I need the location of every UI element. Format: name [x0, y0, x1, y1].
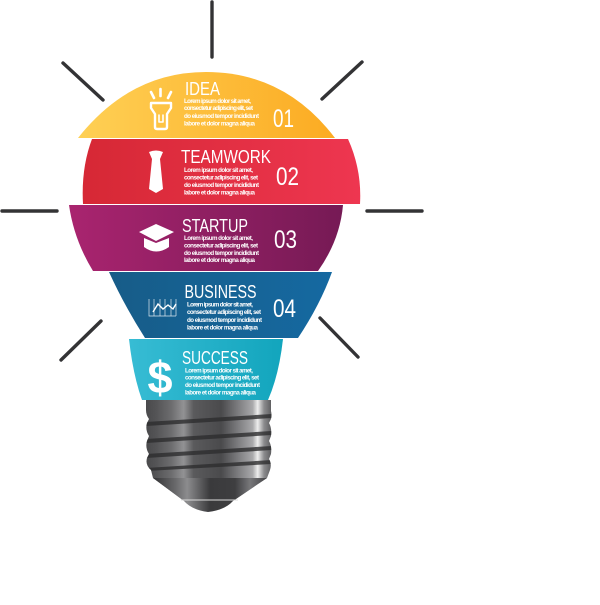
- body text: [185, 368, 260, 396]
- body text: consectetur adipiscing elit, set: [184, 105, 253, 112]
- body text: consectetur adipiscing elit, set: [185, 374, 259, 382]
- body text: do eiusmod tempor incididunt: [184, 113, 259, 120]
- heading: BUSINESS: [184, 282, 256, 302]
- body text: Lorem ipsum dolor sit amet,: [187, 302, 253, 308]
- panel: idea: [78, 72, 335, 138]
- body text: Lorem ipsum dolor sit amet,: [185, 368, 253, 374]
- number: 04: [273, 295, 296, 323]
- panel: teamwork: [83, 139, 360, 204]
- base threads: [146, 400, 272, 501]
- body text: labore et dolor magna aliqua: [184, 120, 256, 128]
- panel: success: [129, 339, 283, 403]
- number: 01: [273, 105, 294, 133]
- body text: consectetur adipiscing elit, set: [184, 174, 258, 182]
- bulb screw base: [146, 400, 272, 512]
- panel: business: [109, 272, 332, 338]
- icon: graduation cap: [139, 224, 174, 252]
- icon: line chart: [149, 299, 176, 316]
- number: 02: [276, 163, 299, 191]
- body text: [187, 302, 262, 332]
- body text: Lorem ipsum dolor sit amet,: [184, 235, 253, 242]
- body text: labore et dolor magna aliqua: [185, 390, 257, 396]
- body text: consectetur adipiscing elit, set: [187, 309, 261, 316]
- body text: labore et dolor magna aliqua: [184, 190, 256, 196]
- body text: do eiusmod tempor incididunt: [184, 250, 259, 257]
- body text: Lorem ipsum dolor sit amet,: [184, 98, 251, 105]
- body text: [184, 98, 259, 128]
- body text: consectetur adipiscing elit, set: [184, 242, 258, 250]
- panel: startup: [69, 205, 343, 271]
- light bulb infographic: [0, 0, 424, 512]
- body text: do eiusmod tempor incididunt: [187, 317, 262, 324]
- number: 03: [274, 226, 297, 254]
- base thread shadows: [146, 414, 272, 471]
- body text: labore et dolor magna aliqua: [187, 324, 259, 332]
- heading: STARTUP: [182, 216, 248, 236]
- icon: flashlight: [151, 89, 171, 129]
- body text: [184, 167, 259, 196]
- base tip: [153, 478, 267, 512]
- body text: labore et dolor magna aliqua: [184, 257, 256, 264]
- heading: SUCCESS: [182, 348, 248, 368]
- icon: dollar sign: $: [147, 352, 173, 403]
- body text: [184, 235, 259, 264]
- body text: Lorem ipsum dolor sit amet,: [184, 167, 253, 174]
- icon: tie: [149, 150, 163, 193]
- rays of light: [2, 2, 422, 360]
- body text: do eiusmod tempor incididunt: [184, 182, 259, 189]
- heading: IDEA: [185, 79, 220, 99]
- body text: do eiusmod tempor incididunt: [185, 382, 260, 389]
- heading: TEAMWORK: [181, 147, 271, 167]
